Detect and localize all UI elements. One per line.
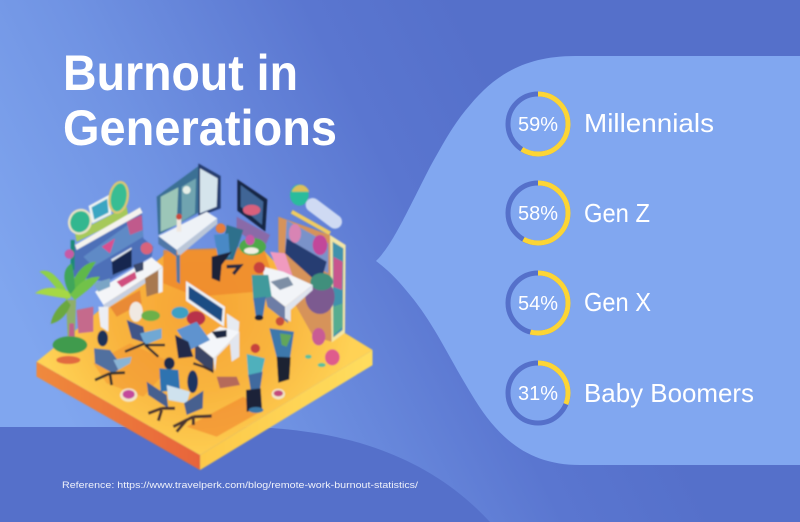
center desk and monitor	[171, 281, 239, 373]
label: Millennials: Millennials	[584, 108, 714, 138]
gauge: Gen Z 58%: 58%	[518, 203, 558, 225]
label: Gen Z: Gen Z	[584, 198, 650, 228]
title: Burnout in	[63, 45, 298, 101]
right back: ball and pill	[290, 184, 335, 233]
gauge: Gen Z 58%	[508, 183, 568, 243]
standing person, right front	[269, 317, 294, 383]
right panel	[376, 56, 800, 465]
gauge: Baby Boomers 31%: 31%	[518, 383, 558, 405]
title	[63, 45, 337, 156]
palm tree	[35, 262, 100, 364]
seated person at center desk	[175, 311, 213, 372]
office illustration	[35, 163, 373, 470]
right screen wall	[270, 217, 346, 345]
seated person, back	[212, 223, 243, 282]
gauge: Millennials 59%: 59%	[518, 114, 558, 136]
seated person with chair, upper left	[125, 302, 165, 357]
platform	[37, 247, 373, 470]
back center partition and desk	[157, 163, 221, 284]
floor items	[120, 349, 340, 402]
back monitor	[237, 179, 270, 250]
gauge: Gen X 54%	[508, 273, 568, 333]
left desk	[93, 247, 163, 332]
label: Gen X: Gen X	[584, 287, 651, 317]
gauge: Baby Boomers 31%	[508, 363, 568, 423]
left wall with shelves	[65, 181, 153, 282]
plant on back desk	[239, 235, 266, 255]
standing person, front	[246, 344, 265, 413]
seated pair with chairs, front	[147, 357, 212, 432]
bottom wave	[0, 427, 490, 522]
title: Generations	[63, 100, 337, 156]
seated person with chair, left	[94, 330, 132, 385]
gauge: Gen X 54%: 54%	[518, 293, 558, 315]
standing person, right back	[252, 262, 272, 320]
right desk	[263, 267, 313, 323]
label: Baby Boomers: Baby Boomers	[584, 378, 754, 408]
gauge: Millennials 59%	[508, 94, 568, 154]
reference: Reference: https://www.travelperk.com/blog/remote-work-burnout-statistics/	[62, 480, 418, 491]
